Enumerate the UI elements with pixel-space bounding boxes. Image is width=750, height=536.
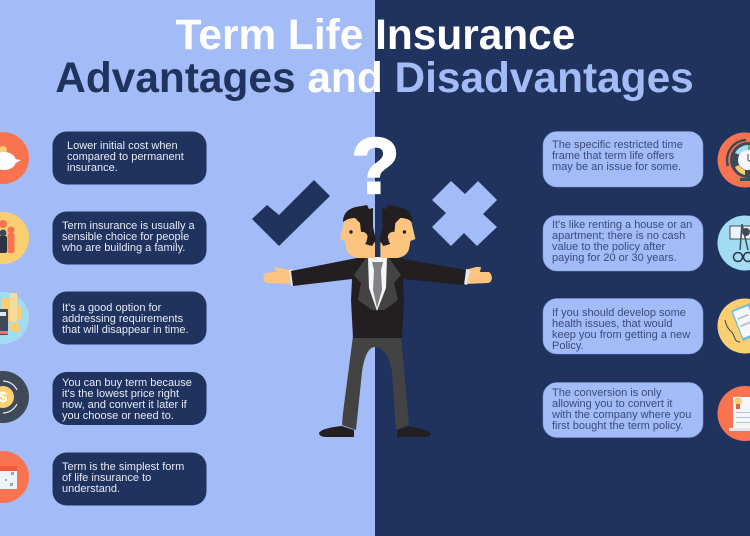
disadvantage 4: allowing you to convert it [552, 398, 672, 410]
disadvantage 3: If you should develop some [552, 307, 686, 319]
advantage 3 [52, 292, 206, 344]
shirt [368, 257, 387, 311]
right head [379, 205, 415, 258]
title: Advantages and Disadvantages [55, 54, 694, 101]
advantage 3: It's a good option for [62, 302, 162, 314]
jacket [291, 257, 466, 338]
advantage 4 [52, 372, 206, 425]
lapels [354, 258, 401, 310]
disadvantage 3: health issues, that would [552, 318, 672, 330]
icon: dollar coin [0, 371, 29, 423]
left head [340, 205, 376, 258]
advantage 2: sensible choice for people [62, 231, 189, 243]
icon: certificate scroll [718, 386, 750, 441]
advantage 3: that will disappear in time. [62, 324, 189, 336]
trousers [342, 336, 409, 430]
advantage 2: Term insurance is usually a [62, 220, 196, 232]
advantage 1 [52, 132, 206, 184]
disadvantage 1: frame that term life offers [552, 150, 675, 162]
advantage 2: who are building a family. [61, 242, 185, 254]
icon: clock [718, 132, 750, 188]
shoes [319, 426, 431, 437]
advantage 5: of life insurance to [62, 472, 151, 484]
title: Term Life Insurance [176, 11, 575, 58]
disadvantage 2: paying for 20 or 30 years. [552, 252, 677, 264]
advantage 1: Lower initial cost when [67, 140, 178, 152]
disadvantage 1: The specific restricted time [552, 139, 683, 151]
disadvantage 2: It's like renting a house or an [552, 219, 692, 231]
advantage 2 [52, 212, 206, 264]
advantage 5 [52, 452, 206, 506]
disadvantage 4 [543, 382, 703, 438]
panel: disadvantages [543, 132, 750, 441]
disadvantage 2: value to the policy after [552, 241, 665, 253]
icon: cross mark [432, 181, 497, 246]
tie [372, 262, 383, 308]
disadvantage 2: apartment; there is no cash [552, 230, 685, 242]
advantage 1: compared to permanent [67, 151, 184, 163]
icon: clipboard and stethoscope [718, 298, 750, 354]
advantage 1: insurance. [67, 162, 118, 174]
icon: check mark [252, 180, 330, 246]
disadvantage 1 [543, 132, 703, 187]
disadvantage 4: with the company where you [551, 409, 691, 421]
disadvantage 1: may be an issue for some. [552, 161, 681, 173]
disadvantage 4: first bought the term policy. [552, 420, 683, 432]
disadvantage 4: The conversion is only [552, 387, 662, 399]
icon: scissors cutting money [718, 216, 750, 270]
advantage 3: addressing requirements [62, 313, 184, 325]
advantage 4: it's the lowest price right [62, 388, 179, 400]
icon: family [0, 212, 29, 264]
disadvantage 2 [543, 216, 703, 271]
icon: piggy bank [0, 132, 29, 184]
hands [263, 267, 492, 284]
advantage 4: now, and convert it later if [62, 399, 188, 411]
disadvantage 3: Policy. [552, 340, 584, 352]
figure: two-headed businessman [263, 205, 492, 437]
panel: advantages [0, 132, 206, 506]
title [55, 11, 694, 101]
icon: calculator and buildings [0, 292, 29, 344]
advantage 4: You can buy term because [62, 377, 192, 389]
advantage 5: Term is the simplest form [62, 461, 184, 473]
icon: calendar [0, 451, 29, 503]
disadvantage 3: keep you from getting a new [552, 329, 690, 341]
advantage 4: you choose or need to. [62, 410, 174, 422]
disadvantage 3 [543, 298, 703, 354]
shirt cuffs [289, 269, 470, 286]
icon: question mark: ? [351, 121, 400, 210]
advantage 5: understand. [62, 483, 120, 495]
